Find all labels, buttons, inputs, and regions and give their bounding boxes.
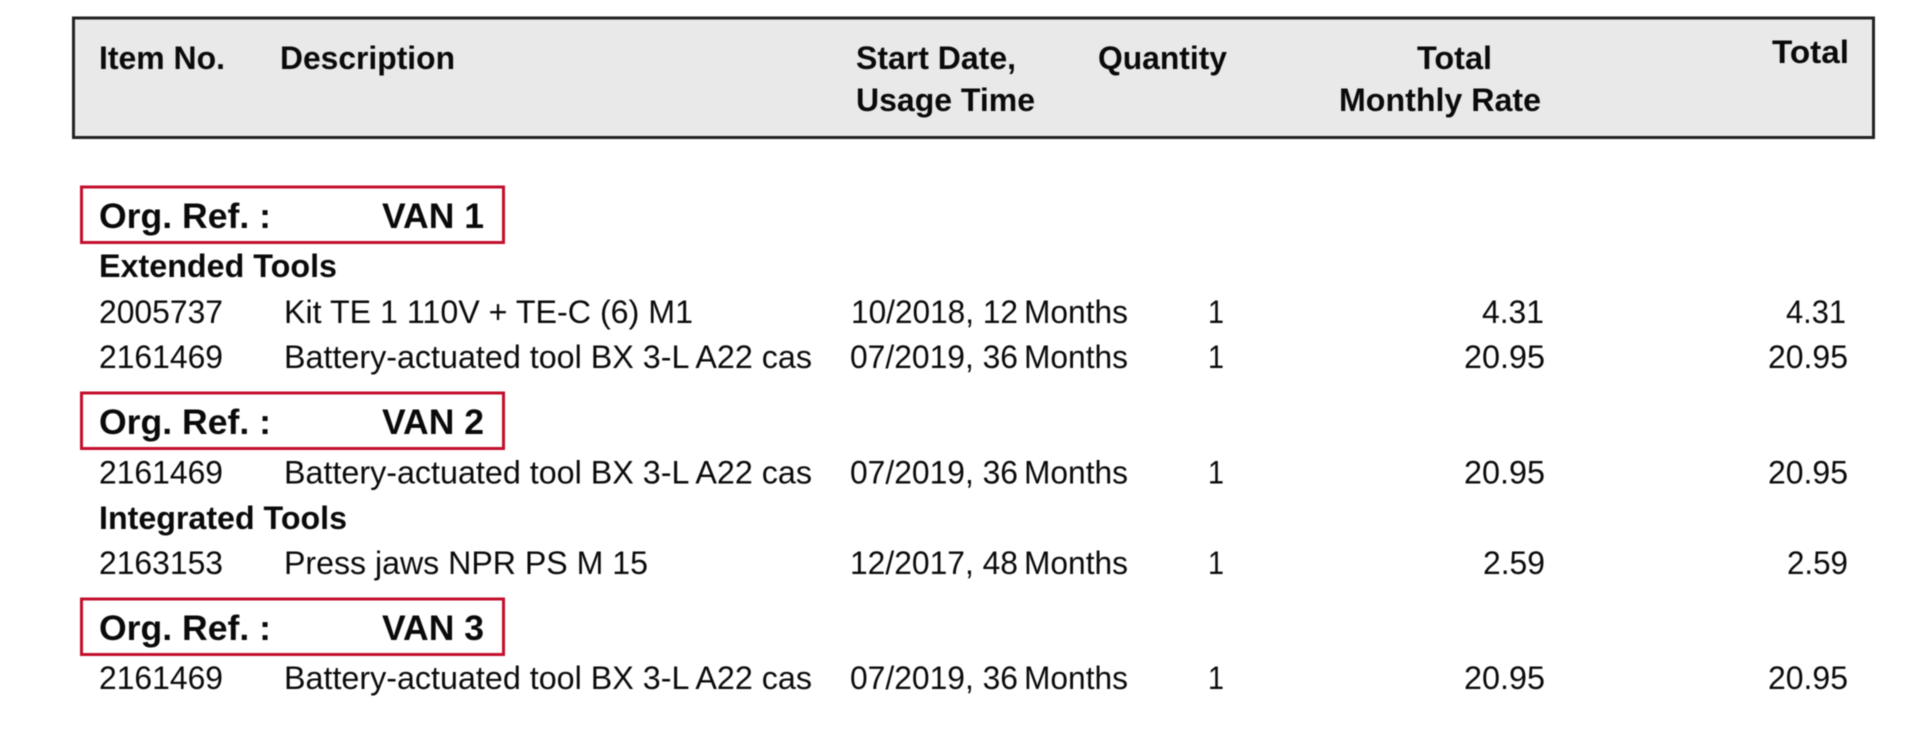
org ref box: VAN 2: VAN 2	[382, 403, 484, 442]
row: 2163153: 2.59	[1483, 545, 1545, 581]
row: 2161469 under VAN 3: 20.95	[1464, 660, 1545, 696]
row: 2161469 under VAN 3: Months	[1024, 660, 1128, 696]
row: 2161469 under VAN 1: Battery-actuated tool BX 3-L A22 cas	[284, 339, 812, 375]
row: 2163153: 2.59	[1787, 545, 1848, 581]
row: 2161469 under VAN 1: 1	[1208, 339, 1224, 375]
row: 2005737: 2005737	[99, 294, 223, 330]
org ref box: VAN 2	[82, 393, 504, 448]
row: 2161469 under VAN 2: 1	[1208, 454, 1224, 490]
group heading: Integrated Tools: Integrated Tools	[99, 500, 347, 536]
row: 2163153: 2163153	[99, 545, 223, 581]
row: 2163153: Press jaws NPR PS M 15	[284, 545, 648, 581]
row: 2161469 under VAN 2: 2161469	[99, 454, 223, 490]
table header band: Quantity	[1098, 40, 1227, 76]
org ref box: VAN 3: Org. Ref. :	[99, 609, 271, 648]
row: 2161469 under VAN 1: 20.95	[1464, 339, 1545, 375]
row: 2161469 under VAN 2: Battery-actuated tool BX 3-L A22 cas	[284, 454, 812, 490]
row: 2161469 under VAN 3: 2161469	[99, 660, 223, 696]
row: 2005737: 10/2018, 12	[851, 294, 1018, 330]
row: 2163153: Months	[1024, 545, 1128, 581]
org ref box: VAN 1	[82, 187, 504, 242]
row: 2161469 under VAN 1: 07/2019, 36	[850, 339, 1018, 375]
row: 2161469 under VAN 1: 20.95	[1768, 339, 1848, 375]
org ref box: VAN 1: VAN 1	[382, 197, 484, 236]
row: 2161469 under VAN 1: Months	[1024, 339, 1128, 375]
row: 2161469 under VAN 2: 20.95	[1768, 454, 1848, 490]
row: 2161469 under VAN 2: 07/2019, 36	[850, 454, 1018, 490]
table header band: Item No.	[99, 40, 225, 76]
row: 2161469 under VAN 3	[99, 660, 1848, 696]
table header band: Monthly Rate	[1339, 82, 1541, 118]
row: 2005737: 4.31	[1786, 294, 1846, 330]
row: 2161469 under VAN 2: 20.95	[1464, 454, 1545, 490]
group heading: Extended Tools: Extended Tools	[99, 248, 337, 284]
row: 2005737: Kit TE 1 110V + TE-C (6) M1	[284, 294, 693, 330]
org ref box: VAN 1: Org. Ref. :	[99, 197, 271, 236]
row: 2161469 under VAN 2: Months	[1024, 454, 1128, 490]
table header band: Total	[1417, 40, 1492, 76]
org ref box: VAN 3	[82, 599, 504, 654]
org ref box: VAN 3: VAN 3	[382, 609, 484, 648]
row: 2005737: 1	[1208, 294, 1224, 330]
table header band: Usage Time	[856, 82, 1035, 118]
row: 2161469 under VAN 3: 1	[1208, 660, 1224, 696]
table header band: Start Date,	[856, 40, 1016, 76]
row: 2163153: 1	[1208, 545, 1224, 581]
org ref box: VAN 2: Org. Ref. :	[99, 403, 271, 442]
row: 2161469 under VAN 3: 07/2019, 36	[850, 660, 1018, 696]
row: 2161469 under VAN 1	[99, 339, 1848, 375]
row: 2005737	[99, 294, 1846, 330]
row: 2163153: 12/2017, 48	[850, 545, 1018, 581]
row: 2161469 under VAN 3: Battery-actuated tool BX 3-L A22 cas	[284, 660, 812, 696]
row: 2161469 under VAN 3: 20.95	[1768, 660, 1848, 696]
row: 2163153	[99, 545, 1848, 581]
table header band	[74, 18, 1874, 138]
row: 2161469 under VAN 1: 2161469	[99, 339, 223, 375]
row: 2161469 under VAN 2	[99, 454, 1848, 490]
table header band: Total	[1772, 34, 1849, 70]
row: 2005737: Months	[1024, 294, 1128, 330]
table header band: Description	[280, 40, 455, 76]
row: 2005737: 4.31	[1482, 294, 1544, 330]
